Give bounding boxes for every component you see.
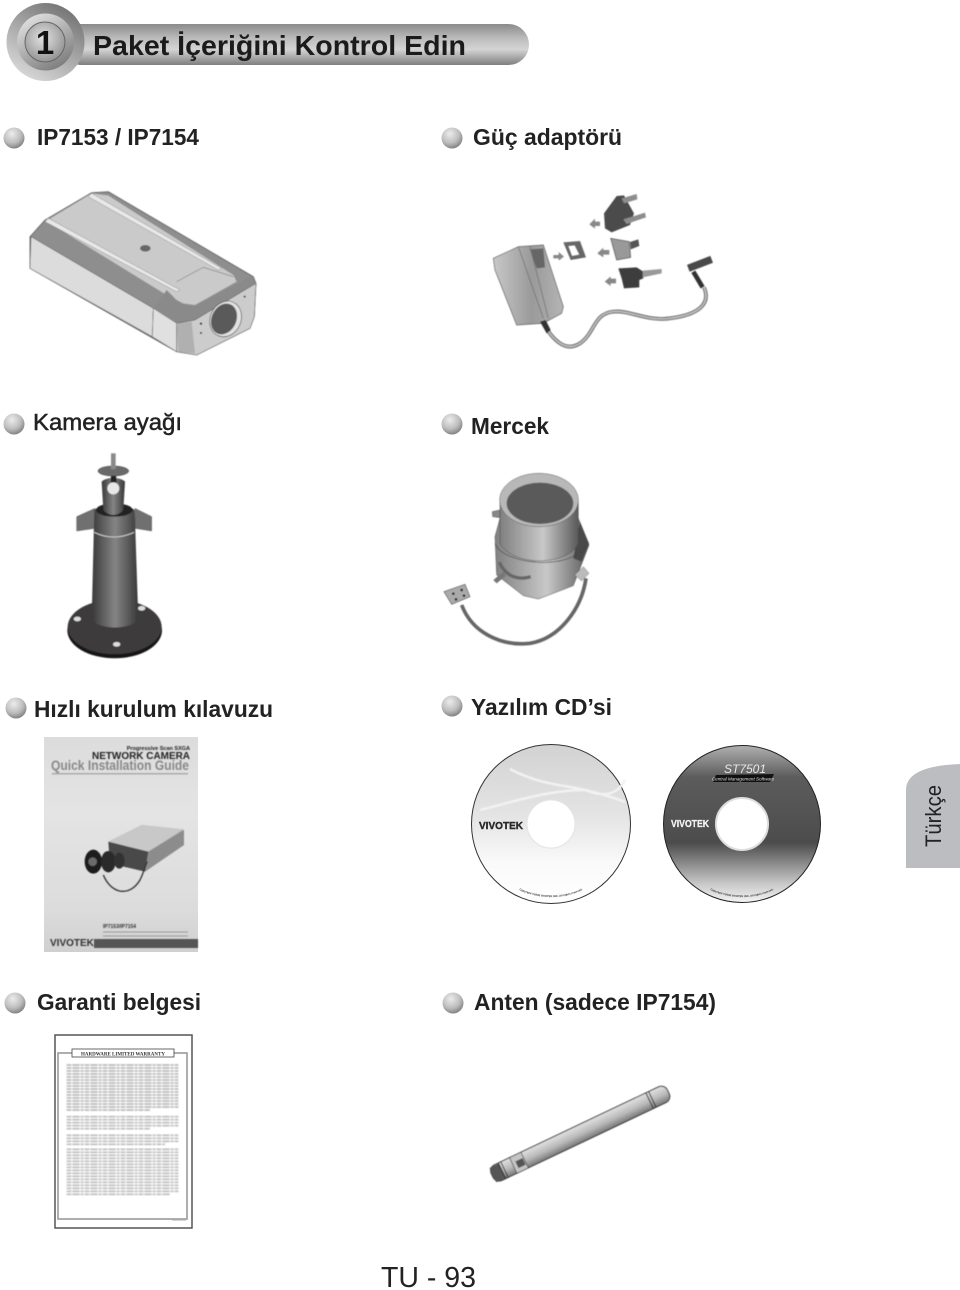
item label: Hızlı kurulum kılavuzu: Hızlı kurulum kılavuzu xyxy=(34,696,273,722)
disc subtitle band: Central Management Software xyxy=(712,776,775,782)
warranty title xyxy=(72,1049,174,1058)
plug EU xyxy=(618,267,643,288)
language tab: Türkçe xyxy=(921,785,946,847)
power adapter illustration xyxy=(493,194,712,347)
warranty title: HARDWARE LIMITED WARRANTY xyxy=(81,1052,165,1058)
item label: Mercek: Mercek xyxy=(471,413,549,439)
disc title: ST7501 xyxy=(724,762,766,776)
number badge: 1 xyxy=(36,24,54,61)
logo: VIVOTEK xyxy=(671,819,710,830)
CD disc, dark xyxy=(663,745,821,903)
quick installation guide booklet: Quick Installation Guide xyxy=(51,758,189,773)
camera mount illustration xyxy=(67,453,162,658)
frame xyxy=(563,241,586,260)
warranty footer mark xyxy=(172,1219,186,1220)
plug US xyxy=(611,238,631,260)
copyright: Copyright ©2008 VIVOTEK INC. All rights reserved. xyxy=(710,888,774,898)
item label: Güç adaptörü: Güç adaptörü xyxy=(473,124,622,150)
booklet camera xyxy=(85,825,184,891)
arrows xyxy=(553,219,616,286)
disc subtitle band xyxy=(712,774,775,782)
header pill xyxy=(60,24,529,65)
heading: Paket İçeriğini Kontrol Edin xyxy=(93,30,466,61)
item label: Anten (sadece IP7154): Anten (sadece IP7154) xyxy=(474,989,716,1015)
quick installation guide booklet xyxy=(44,737,198,952)
plug UK xyxy=(604,195,634,232)
quick installation guide booklet: NETWORK CAMERA xyxy=(92,751,190,762)
cable connector xyxy=(444,584,470,604)
item label: Kamera ayağı: Kamera ayağı xyxy=(33,409,182,435)
cable xyxy=(543,287,706,347)
lower body xyxy=(495,518,589,599)
copyright: Copyright ©2008 VIVOTEK INC. All rights reserved. xyxy=(520,888,582,898)
booklet footer: IP7153/IP7154 xyxy=(103,924,136,930)
antenna illustration xyxy=(488,1084,672,1183)
lens cable xyxy=(462,578,586,644)
camera illustration xyxy=(30,192,256,355)
item label: Yazılım CD’si: Yazılım CD’si xyxy=(471,694,612,720)
adapter body xyxy=(493,245,563,325)
item label: Garanti belgesi: Garanti belgesi xyxy=(37,989,201,1015)
lens illustration xyxy=(444,473,589,644)
DC connector xyxy=(688,259,712,268)
lens tab xyxy=(575,567,589,581)
CD disc, light xyxy=(471,744,631,904)
section header bar xyxy=(6,3,529,81)
quick installation guide booklet: VIVOTEK xyxy=(50,938,95,949)
upper barrel xyxy=(500,500,578,561)
booklet titles: Progressive Scan SXGA xyxy=(127,746,190,752)
number badge xyxy=(6,3,84,81)
item label: IP7153 / IP7154: IP7153 / IP7154 xyxy=(37,124,199,150)
warranty card xyxy=(55,1035,192,1228)
warranty body text xyxy=(67,1065,178,1194)
logo: VIVOTEK xyxy=(479,820,523,832)
language tab xyxy=(906,764,960,868)
